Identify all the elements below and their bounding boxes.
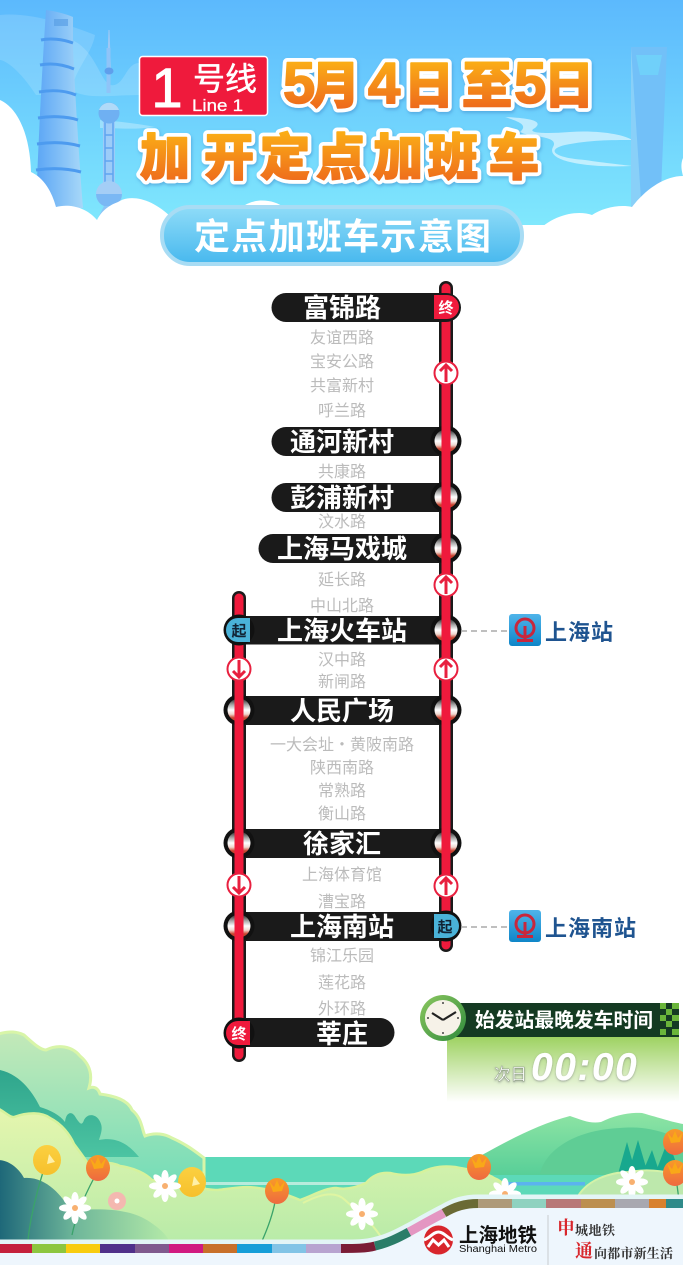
right hills	[473, 1113, 683, 1175]
header badge: Line 1: 1	[151, 56, 183, 119]
station: 上海火车站: 起	[231, 623, 247, 640]
intermediate stations	[270, 329, 414, 1018]
sky background	[0, 0, 683, 225]
intermediate stations: 陕西南路	[310, 759, 374, 777]
intermediate stations: 汶水路	[318, 513, 366, 531]
station: 通河新村	[272, 424, 462, 458]
station: 人民广场	[224, 693, 462, 727]
station: 上海南站: 起	[437, 919, 453, 936]
panel: last departure time: 始发站最晚发车时间	[475, 1008, 653, 1032]
title line 2: 加开定点加班车	[140, 130, 539, 186]
intermediate stations: 共富新村	[310, 377, 374, 395]
illustration: Shanghai World Financial Center	[631, 47, 667, 215]
station: 彭浦新村	[272, 480, 462, 514]
header badge: Line 1	[140, 56, 268, 119]
line: northbound track	[439, 281, 453, 952]
right bush	[576, 1170, 683, 1200]
arrow: up 4	[434, 874, 458, 898]
intermediate stations: 常熟路	[318, 782, 366, 800]
dark front mound	[0, 1160, 170, 1245]
stems	[28, 1172, 679, 1241]
callout: 上海站 railway: 上海站	[545, 620, 614, 645]
panel: last departure time: 00:00	[531, 1046, 638, 1089]
station: 莘庄: 终	[231, 1025, 247, 1043]
station: 彭浦新村: 彭浦新村	[290, 483, 394, 513]
tulips and daisies	[33, 1145, 61, 1175]
intermediate stations: 延长路	[318, 571, 366, 589]
front bushes	[0, 1107, 515, 1255]
title line 1: 月	[310, 58, 360, 114]
line: southbound track	[232, 591, 246, 1062]
logo: Shanghai Metro: 上海地铁	[459, 1224, 537, 1247]
intermediate stations: 一大会址・黄陂南路	[270, 736, 414, 754]
header badge: Line 1: Line 1	[192, 96, 243, 115]
illustration: bottom landscape	[0, 1032, 683, 1255]
title line 1: 5	[514, 51, 546, 116]
slogan: 城地铁	[575, 1223, 615, 1238]
intermediate stations: 友谊西路	[310, 329, 374, 347]
arrow: down 1	[228, 658, 250, 680]
decorative sky swirls	[0, 15, 632, 166]
intermediate stations: 衡山路	[318, 805, 366, 823]
callout: 上海南站 railway: 上海南站	[545, 916, 637, 941]
slogan: 申	[557, 1218, 575, 1238]
title line 1: 日	[404, 58, 454, 114]
station: 莘庄: 莘庄	[316, 1019, 368, 1049]
trees	[618, 1140, 680, 1174]
slogan: 通	[575, 1241, 593, 1261]
intermediate stations: 漕宝路	[318, 893, 366, 911]
intermediate stations: 中山北路	[310, 597, 374, 615]
header badge: Line 1: 号线	[193, 61, 257, 97]
intermediate stations: 外环路	[318, 1000, 366, 1018]
station: 莘庄	[224, 1018, 394, 1049]
title line 1: 5	[283, 51, 315, 116]
title line 1: 4	[368, 51, 400, 116]
route lines	[232, 281, 453, 1062]
back hill left	[0, 1032, 204, 1240]
station: 上海火车站	[224, 613, 462, 647]
white clouds under the header	[0, 100, 683, 295]
intermediate stations: 新闸路	[318, 673, 366, 691]
title line 1	[283, 51, 594, 116]
illustration: Shanghai Tower	[36, 10, 83, 208]
intermediate stations: 上海体育馆	[302, 866, 382, 884]
title line 1: 日	[404, 58, 454, 114]
title line 1: 4	[368, 51, 400, 116]
arrow: up 2	[434, 574, 458, 596]
subtitle pill: 定点加班车示意图	[194, 216, 491, 257]
title line 1: 月	[310, 58, 360, 114]
logo: Shanghai Metro: Shanghai Metro	[459, 1243, 537, 1255]
station: 徐家汇: 徐家汇	[303, 829, 381, 859]
intermediate stations: 莲花路	[318, 974, 366, 992]
station: 徐家汇	[224, 826, 462, 860]
panel: last departure time	[420, 995, 679, 1102]
water	[190, 1157, 683, 1247]
intermediate stations: 汉中路	[318, 651, 366, 669]
station: 上海南站: 上海南站	[290, 912, 394, 942]
panel: last departure time: 次日	[494, 1065, 527, 1084]
intermediate stations: 锦江乐园	[310, 947, 374, 965]
intermediate stations: 宝安公路	[310, 353, 374, 371]
station: 通河新村: 通河新村	[290, 427, 394, 457]
icon: clock	[420, 995, 466, 1041]
arrow: down 2	[228, 874, 250, 896]
logo: Shanghai Metro	[424, 1224, 537, 1255]
direction arrows	[228, 362, 458, 898]
slogan	[557, 1218, 673, 1261]
title line 1: 至	[462, 58, 512, 114]
arrow: up 3	[434, 658, 458, 680]
title line 1: 日	[544, 58, 594, 114]
illustration: Oriental Pearl Tower	[96, 30, 122, 222]
callout: 上海南站 railway	[461, 910, 637, 942]
intermediate stations: 呼兰路	[318, 402, 366, 420]
station: 上海马戏城: 上海马戏城	[277, 534, 407, 564]
station: 富锦路: 终	[438, 299, 454, 317]
station: 富锦路	[272, 293, 461, 323]
station: 人民广场: 人民广场	[290, 696, 394, 726]
title line 1: 日	[544, 58, 594, 114]
title line 1: 至	[462, 58, 512, 114]
title line 1: 5	[514, 51, 546, 116]
station: 上海火车站: 上海火车站	[277, 616, 407, 646]
callout: 上海站 railway	[461, 614, 614, 646]
station: 富锦路: 富锦路	[303, 293, 381, 323]
station: 上海马戏城	[258, 531, 462, 565]
slogan: 向都市新生活	[594, 1246, 673, 1261]
station: 上海南站	[224, 909, 462, 943]
dark foliage	[0, 1070, 139, 1157]
arrow: up 1	[434, 362, 458, 384]
title line 1: 5	[283, 51, 315, 116]
title line 2: 加开定点加班车	[140, 130, 539, 186]
intermediate stations: 共康路	[318, 463, 366, 481]
checker pattern	[660, 1003, 679, 1035]
footer band	[0, 1199, 683, 1265]
subtitle pill	[162, 207, 522, 264]
line colour strip	[0, 1199, 683, 1253]
